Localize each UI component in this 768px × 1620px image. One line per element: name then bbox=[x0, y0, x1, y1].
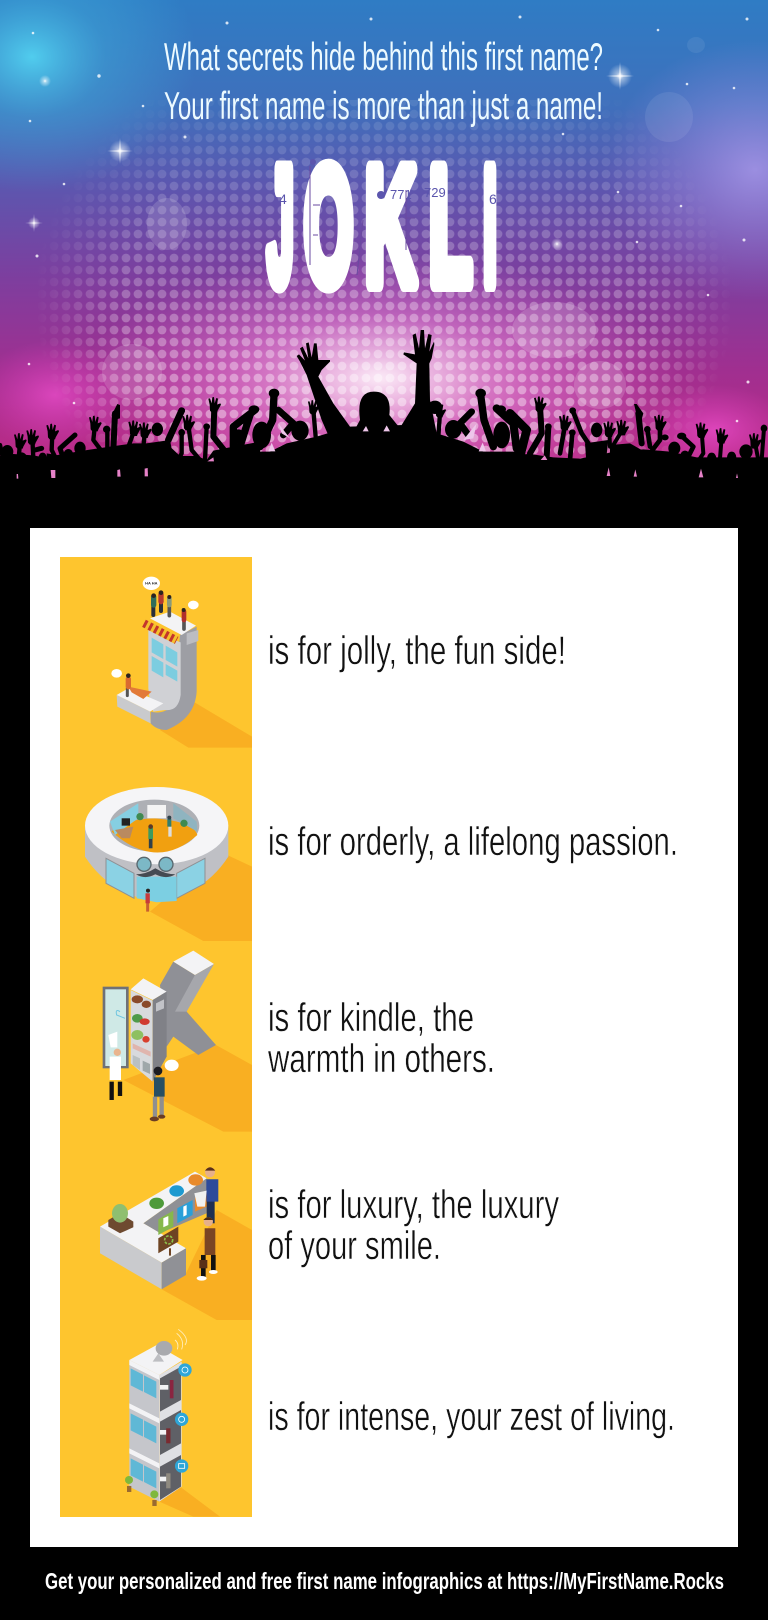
icon: letter L recycling counter bbox=[100, 1167, 252, 1320]
name: JOKLI: 771 bbox=[390, 187, 412, 202]
text: K lines: is for kindle, the bbox=[268, 996, 474, 1040]
icon: letter J building: HA HA bbox=[145, 581, 158, 586]
text: K lines bbox=[267, 996, 495, 1081]
icon: letter K with fridge bbox=[103, 951, 252, 1132]
name: JOKLI: L bbox=[429, 134, 472, 318]
text: J line: is for jolly, the fun side! bbox=[268, 629, 566, 673]
text: L lines: of your smile. bbox=[268, 1224, 441, 1268]
name: JOKLI: K bbox=[365, 134, 416, 318]
icon: letter O round building bbox=[85, 787, 252, 941]
title: two-line question bbox=[164, 36, 603, 128]
yellow illustration column bbox=[60, 557, 252, 1517]
text: K lines: warmth in others. bbox=[267, 1037, 495, 1081]
sparkles and stars bbox=[25, 16, 750, 422]
text: I bbox=[483, 134, 497, 318]
crowd: left section bbox=[0, 397, 263, 527]
name: JOKLI: 6 bbox=[489, 191, 497, 207]
icon: letter I office tower bbox=[125, 1329, 220, 1517]
name: JOKLI: J bbox=[267, 134, 294, 318]
crowd: right section bbox=[510, 396, 768, 527]
name: JOKLI: 729 bbox=[424, 185, 446, 200]
text: L lines: is for luxury, the luxury bbox=[268, 1183, 559, 1227]
crowd silhouette bbox=[0, 330, 768, 529]
white content panel bbox=[30, 528, 738, 1547]
name: JOKLI bbox=[267, 134, 497, 318]
name: JOKLI: 4 bbox=[279, 191, 287, 207]
name: JOKLI: O bbox=[304, 134, 353, 318]
text: L lines bbox=[268, 1183, 559, 1268]
icon: letter J building bbox=[111, 577, 252, 748]
header: concert background bbox=[0, 0, 768, 460]
crowd: central figures bbox=[249, 330, 520, 527]
